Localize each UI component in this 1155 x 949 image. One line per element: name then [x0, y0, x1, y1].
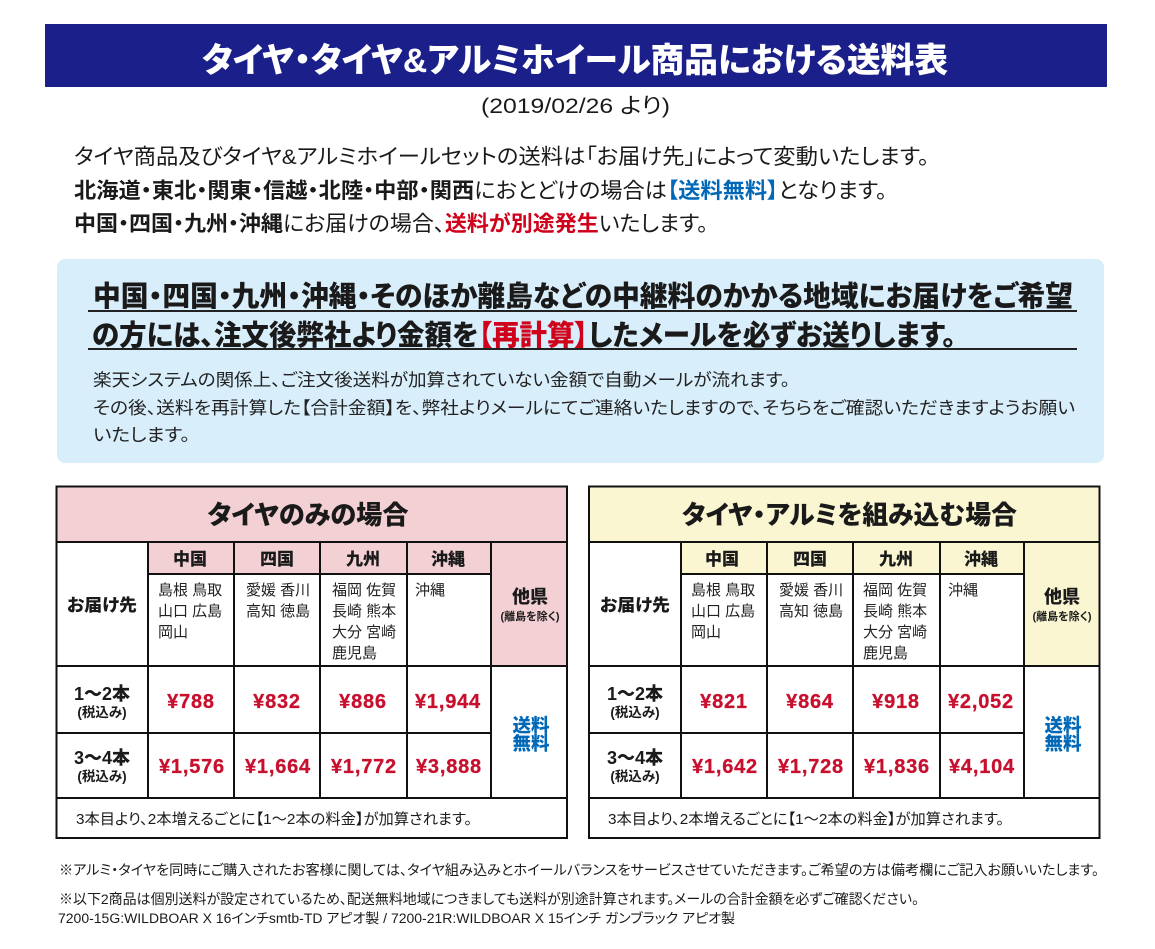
notice heading: の方には、注文後弊社より金額を【再計算】したメールを必ずお送りします。: [92, 319, 956, 352]
table title: タイヤ・アルミを組み込む場合: [682, 500, 1017, 530]
prefecture lists: 高知 徳島: [246, 603, 310, 620]
intro text: タイヤ商品及びタイヤ&アルミホイールセットの送料は「お届け先」によって変動いたします。: [74, 145, 929, 169]
notice body: いたします。: [93, 425, 190, 445]
panel: tires only table: [56, 486, 567, 838]
region headers: 四国: [260, 550, 294, 569]
title banner: [45, 24, 1107, 87]
table footnote: 3本目より、2本増えるごとに【1～2本の料金】が加算されます。: [608, 810, 1004, 828]
prefecture lists: 沖縄: [415, 582, 445, 599]
other prefectures header: [500, 587, 560, 623]
free shipping label: 送料: [1044, 715, 1082, 736]
prices: 3-4 tires: ¥1,728: [778, 756, 844, 778]
prefecture lists: 鹿児島: [332, 645, 377, 662]
row label: 1-2 tires: 1～2本: [74, 683, 130, 704]
table footnote: 3本目より、2本増えるごとに【1～2本の料金】が加算されます。: [76, 810, 472, 828]
footnotes: ※アルミ・タイヤを同時にご購入されたお客様に関しては、タイヤ組み込みとホイールバランスをサービスさせていただきます。ご希望の方は備考欄にご記入お願いいたします。: [59, 862, 1099, 878]
prices: 3-4 tires: ¥1,642: [692, 756, 758, 778]
prices: 3-4 tires: ¥4,104: [949, 756, 1015, 778]
region headers: [705, 549, 998, 569]
prefecture lists: 沖縄: [948, 582, 978, 599]
row label: 3-4 tires: (税込み): [77, 768, 127, 784]
panel: tires with wheels table: [589, 486, 1100, 838]
notice heading: 中国・四国・九州・沖縄・そのほか離島などの中継料のかかる地域にお届けをご希望: [93, 280, 1073, 313]
row label: 3-4 tires: 3～4本: [74, 747, 130, 768]
row label: destination: お届け先: [600, 595, 670, 615]
prefecture lists: 長崎 熊本: [863, 603, 927, 620]
prices: 3-4 tires: ¥3,888: [416, 756, 482, 778]
row label: 3-4 tires: 3～4本: [607, 747, 663, 768]
prefecture lists: 島根 鳥取: [158, 581, 222, 599]
prefecture lists: 鹿児島: [863, 645, 908, 662]
prices: 1-2 tires: [167, 691, 481, 713]
prices: 1-2 tires: ¥832: [253, 691, 301, 713]
footnotes: ※以下2商品は個別送料が設定されているため、配送無料地域につきましても送料が別途計算されます。メールの合計金額を必ずご確認ください。: [59, 891, 919, 907]
prices: 1-2 tires: ¥2,052: [948, 691, 1014, 713]
row label: 3-4 tires: [607, 747, 663, 784]
prefecture lists: 長崎 熊本: [332, 603, 396, 620]
free shipping label: [512, 715, 550, 754]
table title: タイヤのみの場合: [208, 500, 408, 530]
row label: 1-2 tires: (税込み): [610, 704, 660, 720]
prices: 1-2 tires: [700, 691, 1014, 713]
prefecture lists: 岡山: [158, 624, 188, 641]
free shipping label: [1044, 715, 1082, 754]
prefecture lists: 大分 宮崎: [863, 624, 927, 641]
intro text: 中国・四国・九州・沖縄にお届けの場合、送料が別途発生いたします。: [74, 211, 708, 236]
region headers: [173, 549, 465, 569]
prefecture lists: [158, 581, 445, 662]
region headers: 沖縄: [431, 549, 465, 569]
prefecture lists: 山口 広島: [691, 603, 755, 620]
prefecture lists: 山口 広島: [158, 603, 222, 620]
prices: 3-4 tires: [692, 756, 1015, 778]
free shipping label: 送料: [512, 715, 550, 736]
region headers: 九州: [346, 550, 380, 569]
region headers: 中国: [705, 549, 739, 569]
notice body: [93, 370, 1075, 445]
footnotes: [58, 862, 1099, 926]
other prefectures header: [1032, 587, 1092, 623]
row label: 1-2 tires: 1～2本: [607, 683, 663, 704]
prefecture lists: 福岡 佐賀: [863, 582, 927, 599]
other prefectures header: 他県: [1044, 587, 1080, 607]
row label: 1-2 tires: [607, 683, 663, 720]
prices: 1-2 tires: ¥1,944: [415, 691, 481, 713]
prices: 3-4 tires: ¥1,772: [331, 756, 397, 778]
notice body: その後、送料を再計算した【合計金額】を、弊社よりメールにてご連絡いたしますので、そちらをご確認いただきますようお願い: [93, 398, 1075, 418]
prefecture lists: 愛媛 香川: [779, 582, 843, 599]
region headers: 沖縄: [964, 549, 998, 569]
prefecture lists: 福岡 佐賀: [332, 582, 396, 599]
prices: 1-2 tires: ¥864: [786, 691, 834, 713]
prefecture lists: 島根 鳥取: [691, 581, 755, 599]
region headers: 九州: [879, 550, 913, 569]
other prefectures header: 他県: [512, 587, 548, 607]
prices: 3-4 tires: ¥1,576: [159, 756, 225, 778]
notice body: 楽天システムの関係上、ご注文後送料が加算されていない金額で自動メールが流れます。: [93, 370, 790, 390]
row label: destination: お届け先: [67, 595, 137, 615]
intro text: 北海道・東北・関東・信越・北陸・中部・関西 におとどけの場合は 【送料無料】となります。: [74, 179, 887, 203]
prices: 1-2 tires: ¥821: [700, 691, 748, 713]
intro text: [74, 145, 929, 236]
free shipping label: 無料: [1044, 733, 1082, 754]
other prefectures header: (離島を除く): [1032, 609, 1092, 623]
panel: relay fee notice: [57, 259, 1104, 463]
prefecture lists: 高知 徳島: [779, 603, 843, 620]
other prefectures header: (離島を除く): [500, 609, 560, 623]
prices: 1-2 tires: ¥918: [872, 691, 920, 713]
prices: 1-2 tires: ¥788: [167, 691, 215, 713]
prices: 3-4 tires: ¥1,836: [864, 756, 930, 778]
prices: 1-2 tires: ¥886: [339, 691, 387, 713]
row label: 1-2 tires: [74, 683, 130, 720]
prefecture lists: 愛媛 香川: [246, 582, 310, 599]
region headers: 四国: [793, 550, 827, 569]
prefecture lists: [691, 581, 978, 662]
free shipping label: 無料: [512, 733, 550, 754]
prices: 3-4 tires: ¥1,664: [245, 756, 311, 778]
footnotes: 7200-15G:WILDBOAR X 16インチsmtb-TD アピオ製 / 7200-21R:WILDBOAR X 15インチ ガンブラック アピオ製: [58, 910, 735, 926]
prefecture lists: 大分 宮崎: [332, 624, 396, 641]
row label: 1-2 tires: (税込み): [77, 704, 127, 720]
date note: (2019/02/26 より): [481, 94, 670, 118]
row label: 3-4 tires: [74, 747, 130, 784]
region headers: 中国: [173, 549, 207, 569]
row label: 3-4 tires: (税込み): [610, 768, 660, 784]
prices: 3-4 tires: [159, 756, 482, 778]
notice heading: [88, 280, 1077, 352]
title banner: タイヤ・タイヤ&アルミホイール商品における送料表: [202, 42, 948, 80]
prefecture lists: 岡山: [691, 624, 721, 641]
